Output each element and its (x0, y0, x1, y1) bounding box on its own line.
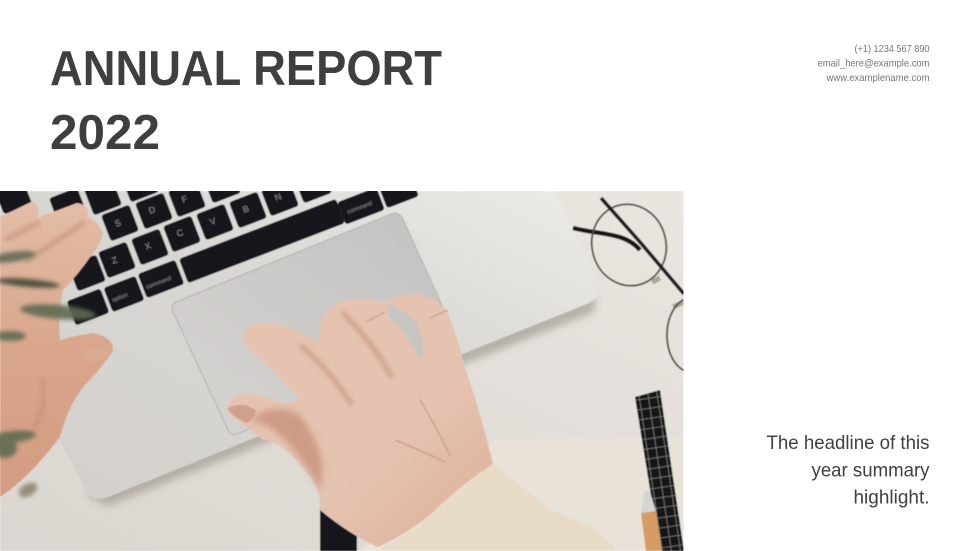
headline (766, 432, 930, 508)
ruler (635, 390, 684, 551)
key labels: command (347, 201, 373, 216)
laptop body (0, 191, 598, 499)
keyboard keys (0, 191, 418, 326)
contact details: www.examplename.com (826, 72, 930, 84)
headline: highlight. (854, 486, 930, 508)
key labels: N (273, 191, 283, 203)
contact details (818, 43, 930, 84)
key labels: option (112, 292, 129, 304)
right hand (228, 294, 493, 547)
paper sheet (362, 524, 420, 550)
key labels: X (143, 240, 152, 252)
headline: year summary (812, 460, 930, 482)
pencil (641, 490, 662, 551)
title: ANNUAL REPORT (50, 42, 442, 96)
key labels (110, 191, 373, 304)
key labels: command (146, 276, 172, 291)
title (50, 42, 442, 160)
key labels: F (180, 193, 189, 205)
title: 2022 (50, 106, 160, 160)
blurred plant leaves (0, 249, 96, 500)
contact details: (+1) 1234 567 890 (854, 43, 930, 55)
headline: The headline of this (766, 432, 930, 454)
photo: hands on laptop (0, 191, 684, 551)
contact details: email_here@example.com (818, 58, 930, 70)
sweater cuff (377, 463, 618, 551)
key labels: D (147, 204, 157, 216)
key labels: Z (110, 254, 119, 266)
thumb shading (250, 409, 322, 490)
trackpad (172, 213, 445, 435)
key labels: V (208, 215, 217, 227)
key labels: S (113, 217, 122, 229)
laptop shadow (85, 296, 596, 506)
glasses (572, 196, 684, 372)
left hand (0, 201, 113, 497)
desk background (0, 191, 684, 551)
black notebook (320, 507, 357, 551)
key labels: C (175, 227, 185, 239)
finger gap (387, 304, 423, 360)
key labels: B (241, 203, 250, 215)
